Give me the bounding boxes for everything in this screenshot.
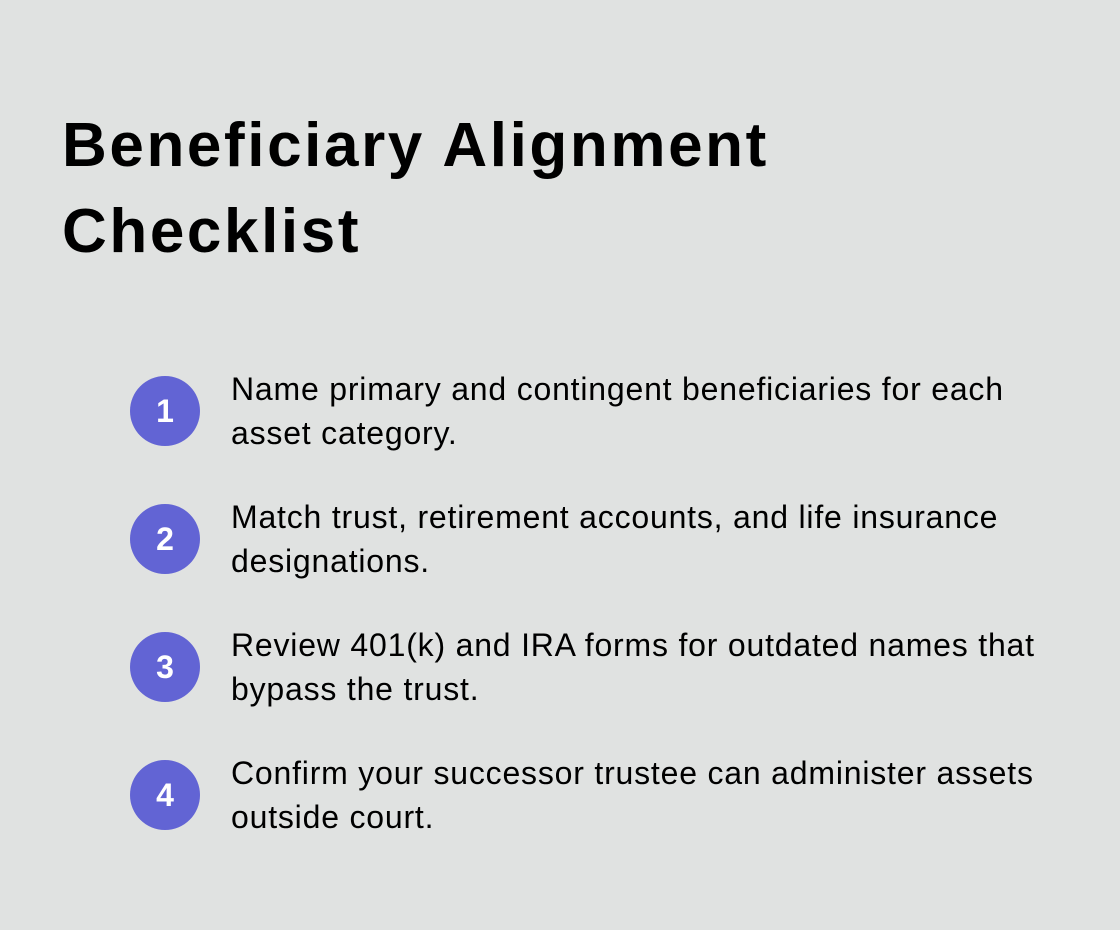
text 1: Name primary and contingent beneficiaries for each <box>231 371 1004 407</box>
text 3: Review 401(k) and IRA forms for outdated names that <box>231 627 1035 663</box>
icon: number 1: 1 <box>156 393 174 429</box>
text 4 <box>231 755 1034 835</box>
icon: number 3 <box>130 632 200 702</box>
title <box>62 111 769 266</box>
icon: number 3: 3 <box>156 649 174 685</box>
icon: number 2 <box>130 504 200 574</box>
title: Beneficiary Alignment <box>62 111 769 180</box>
text 3 <box>231 627 1035 707</box>
icon: number 4: 4 <box>156 777 174 813</box>
item 1 <box>130 371 1004 451</box>
icon: number 1 <box>130 376 200 446</box>
text 3: bypass the trust. <box>231 671 479 707</box>
icon: number 2: 2 <box>156 521 174 557</box>
text 2: Match trust, retirement accounts, and life insurance <box>231 499 998 535</box>
text 2 <box>231 499 998 579</box>
item 3 <box>130 627 1035 707</box>
text 4: outside court. <box>231 799 434 835</box>
text 4: Confirm your successor trustee can administer assets <box>231 755 1034 791</box>
text 1: asset category. <box>231 415 458 451</box>
title: Checklist <box>62 197 361 266</box>
icon: number 4 <box>130 760 200 830</box>
item 4 <box>130 755 1034 835</box>
text 1 <box>231 371 1004 451</box>
text 2: designations. <box>231 543 430 579</box>
item 2 <box>130 499 998 579</box>
